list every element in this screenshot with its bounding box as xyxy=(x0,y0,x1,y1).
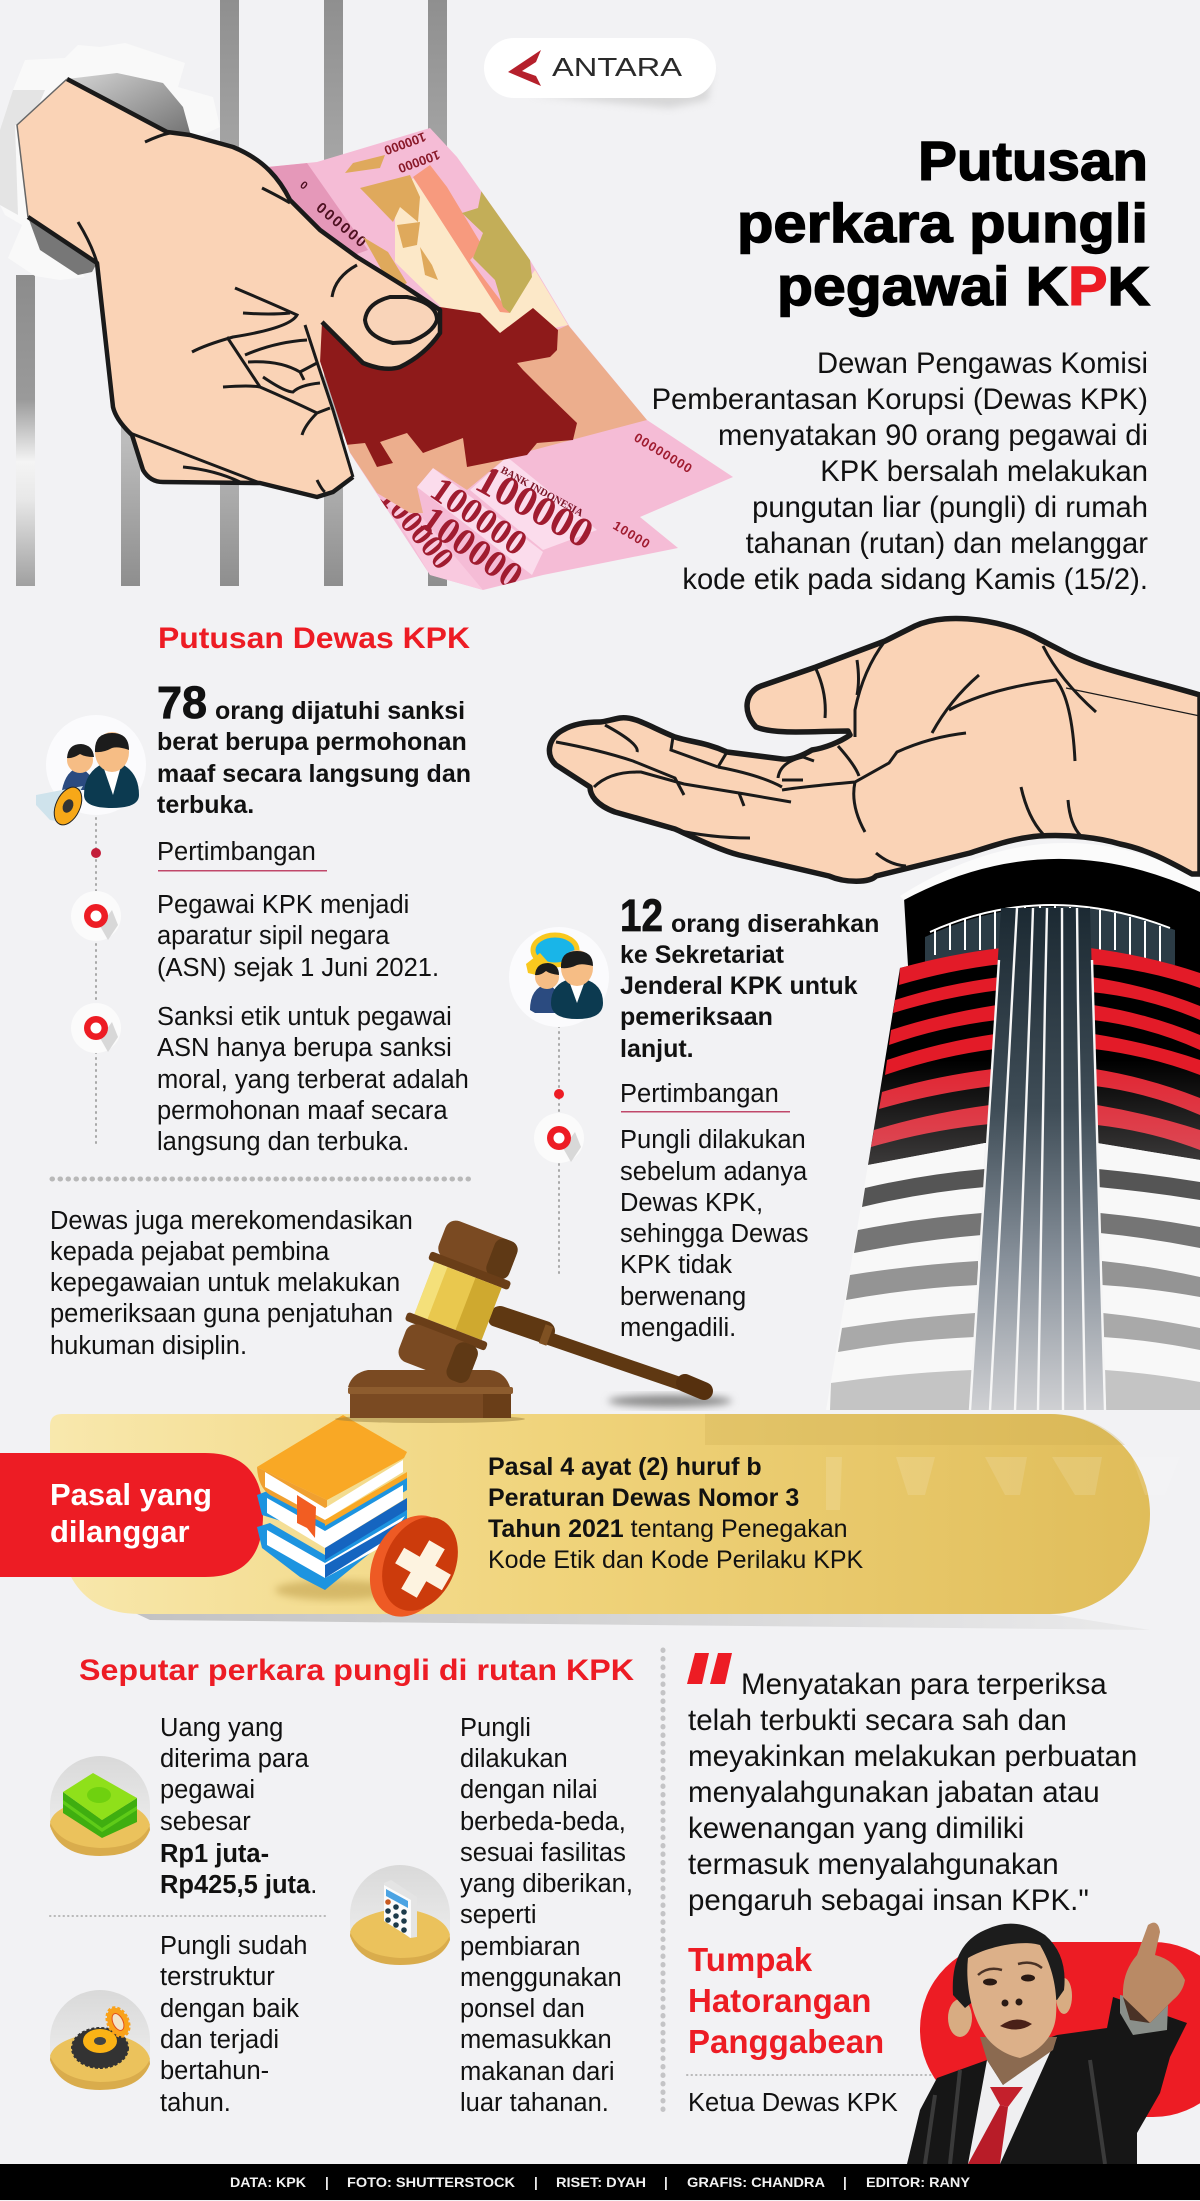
footer credits: | xyxy=(325,2175,329,2190)
text block: varying amounts: dengan nilai xyxy=(460,1776,598,1804)
footer credits: | xyxy=(664,2175,668,2190)
illustration: gavel xyxy=(335,1216,732,1423)
illustration: hand giving money xyxy=(17,79,440,497)
heading: Seputar perkara pungli: Seputar perkara pungli di rutan KPK xyxy=(79,1654,634,1687)
text block: varying amounts: yang diberikan, xyxy=(460,1870,633,1898)
illustration: torn paper hole xyxy=(0,43,220,280)
illustration: banknotes: 100000 xyxy=(468,457,601,558)
title: perkara pungli xyxy=(737,192,1148,254)
text block: money received: pegawai xyxy=(160,1776,255,1804)
footer credits: RISET: DYAH xyxy=(556,2175,646,2190)
intro paragraph xyxy=(652,348,1148,596)
text block: structured pungli: tahun. xyxy=(160,2089,231,2117)
icon: books and cross badge xyxy=(257,1415,472,1630)
text block: varying amounts: seperti xyxy=(460,1901,537,1929)
text block: varying amounts: berbeda-beda, xyxy=(460,1808,626,1836)
illustration: banknotes: 100000 xyxy=(373,479,462,576)
text block: varying amounts: luar tahanan. xyxy=(460,2089,609,2117)
text block: article text xyxy=(488,1453,864,1574)
pin 2 xyxy=(71,1003,121,1053)
icon: people with magnifier xyxy=(509,927,609,1027)
timeline: right xyxy=(534,1026,584,1278)
grey bands xyxy=(862,1169,1200,1207)
text block: 12 orang: Jenderal KPK untuk xyxy=(620,972,858,1000)
text block: 12 orang xyxy=(620,890,879,1063)
central column xyxy=(970,908,1105,1410)
text block: ethics sanction: permohonan maaf secara xyxy=(157,1097,448,1125)
text block: article text: Kode Etik dan Kode Perilaku KPK xyxy=(488,1546,864,1574)
text block: varying amounts: Pungli xyxy=(460,1714,531,1742)
footer credits: EDITOR: RANY xyxy=(866,2175,970,2190)
text block: structured pungli xyxy=(160,1932,307,2117)
text block: varying amounts xyxy=(460,1714,633,2117)
text block: ethics sanction: moral, yang terberat adalah xyxy=(157,1066,469,1094)
label: Pasal yang dilanggar: dilanggar xyxy=(50,1514,190,1549)
text block: 12 orang: orang diserahkan xyxy=(671,910,879,938)
pin xyxy=(534,1113,584,1163)
illustration: banknotes xyxy=(267,128,733,598)
text block: structured pungli: terstruktur xyxy=(160,1963,275,1991)
intro paragraph: kode etik pada sidang Kamis (15/2). xyxy=(682,564,1148,596)
text block: before Dewas existed: sehingga Dewas xyxy=(620,1220,809,1248)
icon: money on platform xyxy=(50,1756,150,1856)
text block: before Dewas existed: Pungli dilakukan xyxy=(620,1126,806,1154)
text block: money received: diterima para xyxy=(160,1745,310,1773)
text block: varying amounts: ponsel dan xyxy=(460,1995,585,2023)
text block: 12 orang: lanjut. xyxy=(620,1035,694,1063)
text block: money received xyxy=(160,1714,317,1899)
quote text: termasuk menyalahgunakan xyxy=(688,1848,1059,1881)
illustration: banknotes: 0 xyxy=(297,179,310,192)
text block: before Dewas existed: mengadili. xyxy=(620,1314,736,1342)
illustration: banknotes: 100000 xyxy=(396,147,442,176)
intro paragraph: Pemberantasan Korupsi (Dewas KPK) xyxy=(652,384,1148,416)
speaker name: Hatorangan xyxy=(688,1982,871,2019)
text block: article text: Peraturan Dewas Nomor 3 xyxy=(488,1484,799,1512)
icon: gear on platform xyxy=(50,1990,150,2090)
illustration: banknotes: 00000000 xyxy=(631,430,696,476)
left red bands xyxy=(885,948,1001,1075)
timeline: left xyxy=(71,812,121,1143)
text block: ethics sanction: ASN hanya berupa sanksi xyxy=(157,1034,452,1062)
text block: 12 orang: ke Sekretariat xyxy=(620,941,785,969)
text block: varying amounts: dilakukan xyxy=(460,1745,568,1773)
speaker name: Panggabean xyxy=(688,2023,884,2060)
quote text xyxy=(688,1668,1137,1917)
illustration: banknotes: 100000 xyxy=(413,498,530,598)
text block: ethics sanction xyxy=(157,1003,469,1156)
footer credits: GRAFIS: CHANDRA xyxy=(687,2175,825,2190)
illustration: banknotes: 100000 xyxy=(423,469,535,563)
intro paragraph: menyatakan 90 orang pegawai di xyxy=(718,420,1148,452)
pin 1 xyxy=(71,891,121,941)
label: Pasal yang dilanggar: Pasal yang xyxy=(50,1477,212,1512)
intro paragraph: KPK bersalah melakukan xyxy=(820,456,1148,488)
text block: recommendation: kepegawaian untuk melakukan xyxy=(50,1269,400,1297)
text block: ASN since 2021: (ASN) sejak 1 Juni 2021. xyxy=(157,954,439,982)
logo: ANTARA: ANTARA xyxy=(552,52,683,82)
intro paragraph: Dewan Pengawas Komisi xyxy=(817,348,1148,380)
illustration: open hand receiving xyxy=(549,618,1200,900)
text block: recommendation: hukuman disiplin. xyxy=(50,1332,247,1360)
speaker role: Ketua Dewas KPK xyxy=(688,2089,898,2117)
illustration: red backdrop xyxy=(920,1942,1200,2117)
text block: structured pungli: dan terjadi xyxy=(160,2026,279,2054)
footer credits xyxy=(0,2164,1200,2200)
footer credits: DATA: KPK xyxy=(230,2175,306,2190)
quote text: pengaruh sebagai insan KPK." xyxy=(688,1884,1089,1917)
text block: recommendation: Dewas juga merekomendasikan xyxy=(50,1207,413,1235)
text block: money received: Rp1 juta- xyxy=(160,1840,269,1868)
text block: ASN since 2021 xyxy=(157,891,439,982)
footer credits: | xyxy=(843,2175,847,2190)
speaker name xyxy=(688,1941,884,2060)
text block: structured pungli: dengan baik xyxy=(160,1995,299,2023)
icon: quotation marks xyxy=(687,1653,732,1684)
text block: varying amounts: sesuai fasilitas xyxy=(460,1839,626,1867)
text block: 78 orang: orang dijatuhi sanksi xyxy=(215,697,465,725)
text block: before Dewas existed: KPK tidak xyxy=(620,1251,732,1279)
text block: structured pungli: bertahun- xyxy=(160,2057,269,2085)
quote text: meyakinkan melakukan perbuatan xyxy=(688,1740,1137,1773)
text block: article text: Pasal 4 ayat (2) huruf b xyxy=(488,1453,762,1481)
footer credits: | xyxy=(534,2175,538,2190)
text block: varying amounts: pembiaran xyxy=(460,1933,580,1961)
text block: ethics sanction: Sanksi etik untuk pegawai xyxy=(157,1003,452,1031)
subheading: Pertimbangan left: Pertimbangan xyxy=(157,838,316,866)
logo: ANTARA xyxy=(484,38,716,108)
text block: recommendation xyxy=(50,1207,413,1360)
title: Putusan xyxy=(918,130,1148,192)
text block: money received: Uang yang xyxy=(160,1714,283,1742)
illustration: prison bars xyxy=(16,0,447,586)
illustration: banknotes: 100000 xyxy=(382,129,428,158)
illustration: banknotes: BANK INDONESIA xyxy=(499,465,585,520)
text block: before Dewas existed: Dewas KPK, xyxy=(620,1189,763,1217)
text block: 12 orang: pemeriksaan xyxy=(620,1003,773,1031)
footer credits: FOTO: SHUTTERSTOCK xyxy=(347,2175,515,2190)
text block: 78 orang: maaf secara langsung dan xyxy=(157,760,471,788)
text block: 78 orang: berat berupa permohonan xyxy=(157,728,467,756)
text block: before Dewas existed xyxy=(620,1126,809,1342)
quote text: Menyatakan para terperiksa xyxy=(741,1668,1107,1701)
illustration: KPK tower xyxy=(826,857,1200,1410)
icon: calculator on platform xyxy=(350,1865,450,1965)
quote text: kewenangan yang dimiliki xyxy=(688,1812,1024,1845)
text block: money received: sebesar xyxy=(160,1808,251,1836)
text block: 78 orang xyxy=(157,677,471,819)
intro paragraph: tahanan (rutan) dan melanggar xyxy=(746,528,1148,560)
text block: 78 orang: 78 xyxy=(157,677,207,728)
illustration: banknotes: 10000 xyxy=(610,518,653,552)
text block: 12 orang: 12 xyxy=(620,890,663,941)
quote text: telah terbukti secara sah dan xyxy=(688,1704,1067,1737)
text block: ASN since 2021: Pegawai KPK menjadi xyxy=(157,891,409,919)
right red bands xyxy=(1090,948,1200,1075)
text block: before Dewas existed: berwenang xyxy=(620,1283,746,1311)
label: Pasal yang dilanggar xyxy=(0,1453,263,1577)
title xyxy=(737,130,1150,317)
text block: ASN since 2021: aparatur sipil negara xyxy=(157,922,390,950)
illustration: speaker portrait xyxy=(907,1923,1187,2164)
icon: people with megaphone xyxy=(36,715,146,829)
text block: recommendation: pemeriksaan guna penjatuhan xyxy=(50,1300,393,1328)
speaker name: Tumpak xyxy=(688,1941,813,1978)
text block: structured pungli: Pungli sudah xyxy=(160,1932,307,1960)
text block: varying amounts: memasukkan xyxy=(460,2026,612,2054)
text block: article text: Tahun 2021 tentang Penegakan xyxy=(488,1515,848,1543)
text block: before Dewas existed: sebelum adanya xyxy=(620,1158,808,1186)
text block: ethics sanction: langsung dan terbuka. xyxy=(157,1128,409,1156)
text block: money received: Rp425,5 juta. xyxy=(160,1871,317,1899)
subheading: Pertimbangan right: Pertimbangan xyxy=(620,1080,779,1108)
quote text: menyalahgunakan jabatan atau xyxy=(688,1776,1100,1809)
heading: Putusan Dewas KPK: Putusan Dewas KPK xyxy=(158,622,470,655)
panel: articles violated xyxy=(0,1414,1180,1630)
title: pegawai K PK xyxy=(777,255,1150,317)
illustration: banknotes: 000000 xyxy=(313,199,371,252)
text block: varying amounts: makanan dari xyxy=(460,2058,615,2086)
text block: 78 orang: terbuka. xyxy=(157,791,254,819)
text block: varying amounts: menggunakan xyxy=(460,1964,622,1992)
text block: recommendation: kepada pejabat pembina xyxy=(50,1238,330,1266)
intro paragraph: pungutan liar (pungli) di rumah xyxy=(752,492,1148,524)
